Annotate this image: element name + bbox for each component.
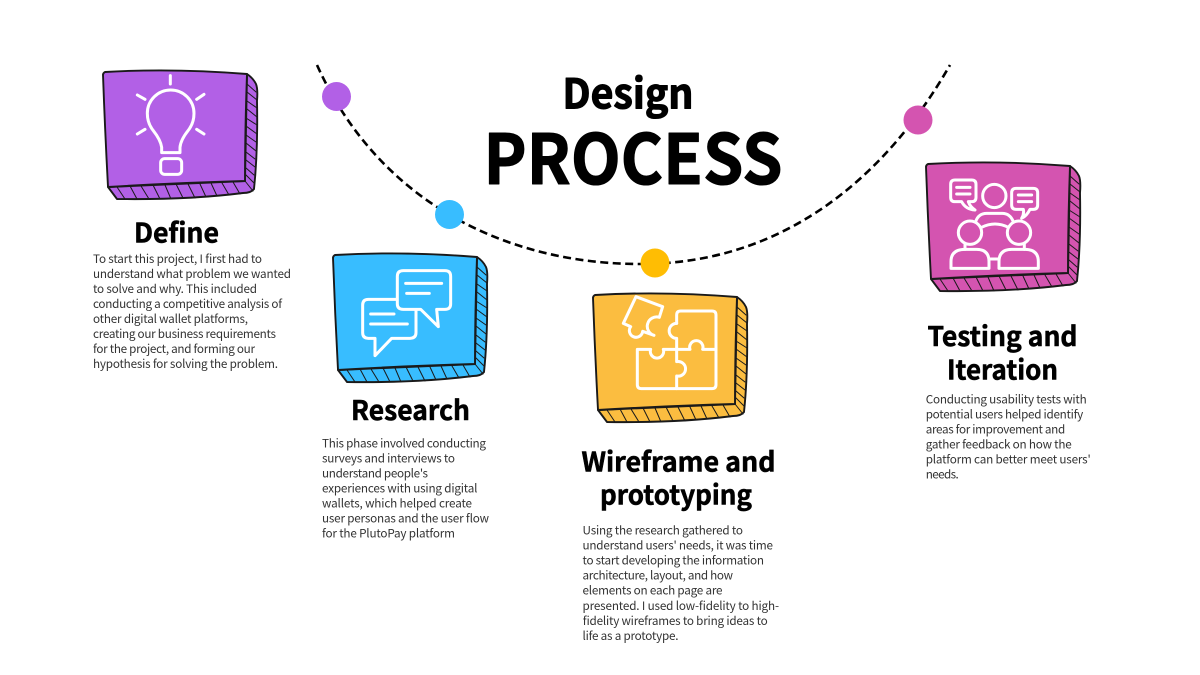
text: define description: creating our business requirements <box>93 325 277 342</box>
text: research description: user personas and the user flow <box>322 510 490 527</box>
text: wireframe description: life as a prototype. <box>582 627 678 644</box>
icon: lightbulb <box>137 76 204 174</box>
timeline dot: testing <box>904 106 932 134</box>
text: research description: surveys and interviews to <box>322 450 455 467</box>
timeline dot: define <box>322 82 351 111</box>
text: wireframe description: Using the research gathered to <box>582 521 743 538</box>
heading: testing and iteration: Testing and <box>928 315 1078 354</box>
text: wireframe description: fidelity wireframes to bring ideas to <box>583 612 768 629</box>
text: testing description: areas for improvement and <box>926 420 1065 437</box>
icon: puzzle pieces <box>623 297 716 389</box>
timeline dot: research <box>435 200 464 229</box>
heading: wireframe and prototyping <box>582 441 776 512</box>
heading: testing and iteration: Iteration <box>947 348 1058 387</box>
text: wireframe description: to start developing the information <box>582 552 764 568</box>
text: testing description: potential users helped identify <box>926 405 1083 422</box>
icon card: testing people <box>926 162 1080 291</box>
heading: wireframe and prototyping: Wireframe and <box>582 441 776 480</box>
text: define description: to solve and why. This included <box>93 280 257 297</box>
text: wireframe description: architecture, layout, and how <box>582 567 734 584</box>
text: research description: wallets, which helped create <box>322 495 472 512</box>
icon: people talking <box>951 180 1038 268</box>
text: define description: for the project, and forming our <box>93 340 255 357</box>
panel: define <box>93 70 291 372</box>
text: define description: conducting a competitive analysis of <box>93 295 283 312</box>
heading: define: Define <box>134 212 219 250</box>
heading: research: Research <box>351 389 470 428</box>
text: testing description: Conducting usability tests with <box>926 390 1087 407</box>
text: research description: understand people's <box>322 465 429 482</box>
text: define description: To start this project, I first had to <box>93 250 262 267</box>
panel: research <box>322 253 490 542</box>
text: define description: other digital wallet platforms, <box>93 310 248 327</box>
text: wireframe description: elements on each page are <box>582 582 722 599</box>
text: testing description: needs. <box>926 465 959 482</box>
title: PROCESS <box>484 104 782 204</box>
icon card: wireframe puzzle <box>593 293 747 422</box>
text: research description <box>322 435 490 542</box>
icon card: define lightbulb <box>103 70 257 199</box>
text: define description: hypothesis for solving the problem. <box>93 355 278 372</box>
timeline dot: wireframe <box>640 248 670 278</box>
icon: chat bubbles <box>363 271 451 356</box>
panel: wireframe and prototyping <box>582 293 779 644</box>
text: wireframe description: understand users' needs, it was time <box>582 536 773 553</box>
text: testing description: gather feedback on how the <box>926 435 1072 452</box>
text: wireframe description: presented. I used low-fidelity to high- <box>582 597 779 614</box>
heading: testing and iteration <box>928 315 1078 387</box>
text: define description <box>93 250 291 372</box>
text: testing description: platform can better meet users' <box>926 450 1091 467</box>
panel: testing and iteration <box>926 162 1091 482</box>
text: wireframe description <box>582 521 779 644</box>
heading: wireframe and prototyping: prototyping <box>600 473 752 512</box>
title <box>484 60 782 204</box>
dashed arc timeline <box>317 65 950 264</box>
text: define description: understand what problem we wanted <box>93 265 291 282</box>
text: research description: for the PlutoPay platform <box>322 525 455 542</box>
title: Design <box>562 60 694 120</box>
text: testing description <box>926 390 1091 482</box>
text: research description: experiences with using digital <box>322 480 478 497</box>
icon card: research chat bubbles <box>333 253 487 382</box>
text: research description: This phase involved conducting <box>322 435 486 452</box>
